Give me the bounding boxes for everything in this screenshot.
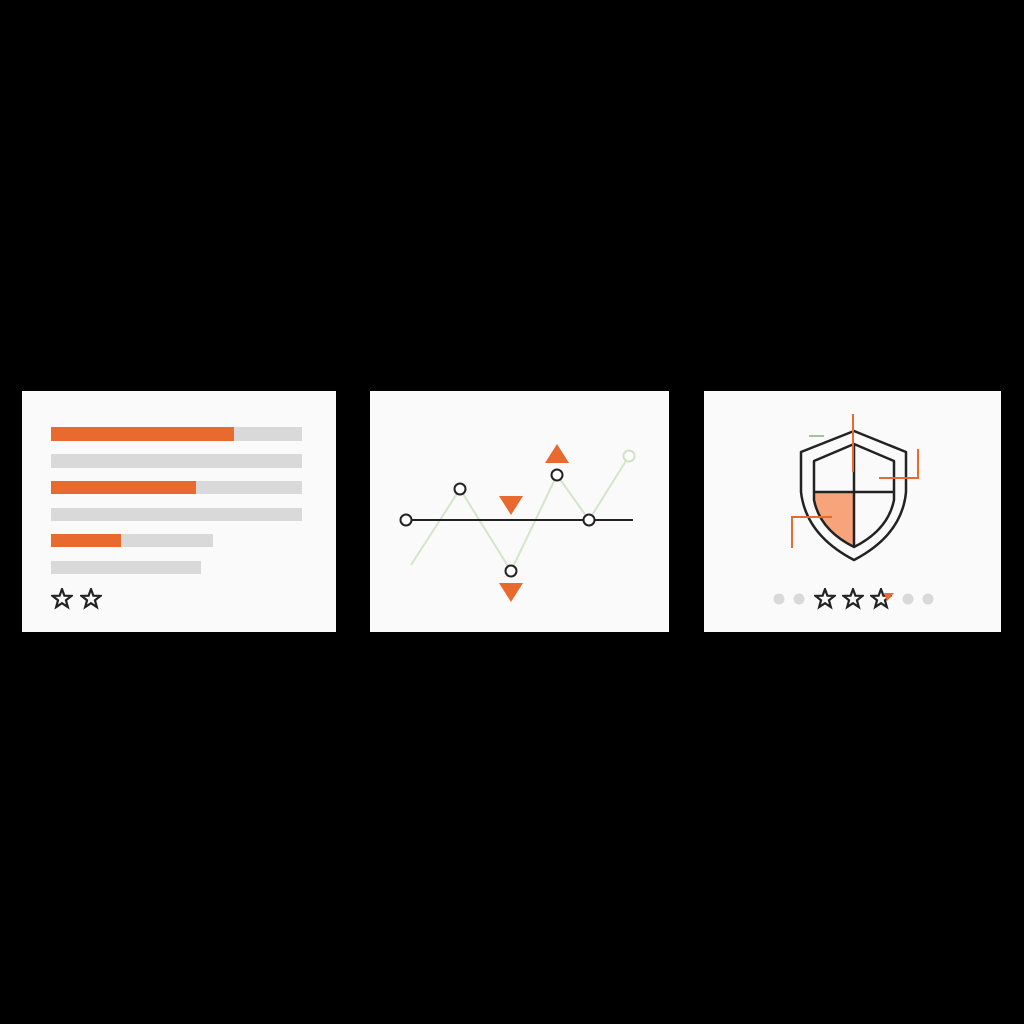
- baseline: [406, 519, 633, 521]
- triangle markers: [499, 444, 569, 602]
- bars: [51, 427, 302, 574]
- stars rating: [53, 589, 100, 607]
- rating dots and stars: [774, 589, 934, 607]
- data points: [400, 450, 634, 576]
- orange accent lines: [792, 414, 918, 548]
- panel: bar chart: [22, 391, 336, 632]
- shield icon: [801, 431, 906, 560]
- panel: shield: [704, 391, 1001, 632]
- panel: line chart: [370, 391, 669, 632]
- green trend line: [411, 456, 629, 571]
